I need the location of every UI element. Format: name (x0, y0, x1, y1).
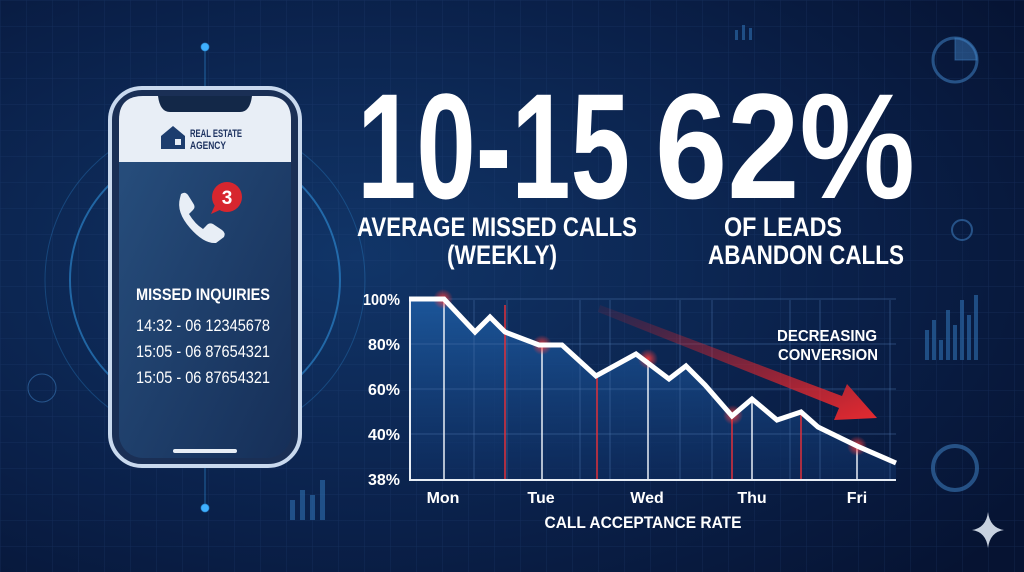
callout: decreasing conversion: DECREASING (777, 328, 877, 345)
phone (110, 88, 300, 466)
badge 3 (211, 182, 242, 214)
y axis labels: 80% (368, 337, 400, 354)
decorative circuit rings around phone (45, 43, 365, 512)
decorative mini bar charts (290, 25, 978, 520)
y axis labels: 60% (368, 382, 400, 399)
phone: 15:05 - 06 87654321 (136, 342, 270, 361)
line chart (363, 289, 896, 532)
x axis labels: Thu (737, 490, 767, 507)
agency name: REAL ESTATE (190, 128, 242, 140)
x axis labels: Wed (630, 490, 664, 507)
stat: 10-15: (WEEKLY) (447, 240, 557, 270)
x axis labels: Mon (427, 490, 459, 507)
stat: 10-15: 10-15 (357, 62, 630, 230)
icon: phone handset (179, 193, 225, 243)
icon: sparkle (972, 512, 1004, 548)
x axis labels: Fri (847, 490, 867, 507)
badge 3: 3 (222, 188, 232, 209)
icon: house (161, 126, 185, 149)
phone: 15:05 - 06 87654321 (136, 368, 270, 387)
stat: 62%: 62% (655, 62, 915, 230)
stat: 62%: ABANDON CALLS (708, 240, 904, 270)
y axis labels (363, 292, 400, 489)
phone: 14:32 - 06 12345678 (136, 316, 270, 335)
phone: AGENCY (190, 140, 227, 152)
stat: 10-15 (357, 62, 637, 270)
arrow: decreasing trend (598, 305, 877, 420)
icon: right decor (28, 38, 977, 490)
stat: 62%: OF LEADS (724, 212, 842, 242)
chart caption: CALL ACCEPTANCE RATE (544, 513, 742, 532)
stat: 10-15: AVERAGE MISSED CALLS (357, 212, 637, 242)
missed inquiries list: MISSED INQUIRIES (136, 285, 270, 304)
line chart: CONVERSION (778, 347, 878, 364)
x axis labels: Tue (527, 490, 555, 507)
y axis labels: 100% (363, 292, 400, 309)
x axis labels (427, 490, 867, 507)
y axis labels: 38% (368, 472, 400, 489)
y axis labels: 40% (368, 427, 400, 444)
